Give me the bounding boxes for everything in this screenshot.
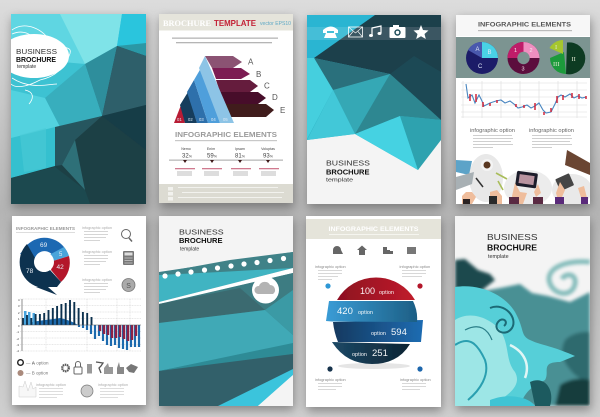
panel: infographic elements with pies [456,15,592,206]
title: template [488,254,509,260]
icon: calculator [123,251,134,265]
title: BROCHURE [326,168,370,177]
option text blocks: infographic option [82,278,112,282]
statistics row: 81% [235,154,246,160]
ribbon circle chart: 251 [372,348,388,359]
statistics row: Voluptas [261,147,275,151]
pie: roman numerals [550,40,585,74]
donut speech-bubble chart [20,238,70,295]
statistics row: 32% [182,154,193,160]
legend [18,360,49,376]
icon: dollar coin [122,278,135,292]
pie: ABC: A [476,47,480,53]
legend: — B option [26,370,49,376]
option text columns [470,128,574,148]
option columns [175,168,279,176]
ribbon circle chart: 420 [337,306,353,317]
pie band [456,37,590,78]
panel: cover 6 angled bands [159,216,293,406]
ribbon circle chart: option [358,310,373,316]
statistics row: 59% [207,154,218,160]
pyramid arrow chart: 02 [188,117,193,122]
icon: envelope [348,27,362,37]
pie: 123 [508,42,540,74]
donut speech-bubble chart: 78 [26,268,34,275]
icon bar [307,25,441,40]
title [180,230,224,252]
option text blocks: infographic option [82,226,112,230]
icon: music note [372,26,381,35]
title [326,160,370,182]
header band: TEMPLATE [214,18,256,28]
panel: cover 3 with icons [307,15,441,204]
icon: music note heads [369,32,382,37]
title [487,233,538,260]
pyramid arrow chart: D [272,93,278,102]
statistics row: Ipsam [235,147,245,151]
ribbon circle chart: 594 [391,327,407,338]
title: BROCHURE [487,243,538,252]
pie: roman numerals: I [555,44,557,51]
pie: 123: 2 [530,48,533,54]
candlestick chart [461,81,587,118]
pyramid arrow chart: A [248,58,254,66]
pyramid arrow chart: 03 [199,117,204,122]
donut speech-bubble chart: 5 [59,252,63,258]
statistics row [169,147,283,163]
title: BUSINESS [179,227,224,236]
marbled artwork [455,259,590,406]
icon: magnifier [122,230,132,242]
panel: circular ribbon chart page [306,216,441,407]
option text columns: infographic option [529,128,574,134]
bar chart: 1 [18,317,20,321]
icon row [62,362,138,374]
pie: 123: 3 [522,66,525,72]
title: BUSINESS [326,159,370,168]
header band: vector EPS10 [260,21,291,27]
pyramid arrow chart [174,56,285,123]
corner option texts [315,264,431,390]
pyramid arrow chart: E [280,106,285,115]
statistics row: Enim [207,147,215,151]
panel: pyramid infographic page [159,14,293,203]
pyramid arrow chart: 01 [177,117,182,122]
option dots [325,283,423,372]
statistics row: Nemo [181,147,191,151]
ribbon circle chart [326,277,423,369]
bottom option blocks: infographic option [36,383,66,387]
header band [306,219,441,239]
ribbon circle chart: option [371,331,386,337]
title: template [326,178,353,184]
bar chart: 3 [18,304,20,308]
pyramid arrow chart: B [256,70,261,79]
header band: INFOGRAPHIC ELEMENTS [328,226,419,233]
statistics row: 93% [263,154,274,160]
option text blocks: infographic option [82,250,112,254]
ribbon circle chart: option [352,352,367,358]
bar chart [16,298,141,353]
title: template [17,64,36,70]
bar chart: -3 [16,343,19,347]
title: BUSINESS [16,47,57,56]
pyramid arrow chart: 04 [211,117,216,122]
desk scene illustration [456,150,592,206]
dots [162,256,286,279]
option text columns: infographic option [470,128,515,134]
icon: camera [390,25,406,38]
bar chart: 4 [18,298,20,302]
ribbon circle chart: 100 [360,286,375,296]
icon: cloud badge [252,276,279,304]
ribbon circle chart: option [379,290,394,296]
icon: star [414,25,428,39]
pie: ABC: C [478,64,483,70]
corner option texts: infographic option [400,377,431,382]
title: BROCHURE [179,236,223,245]
bar chart: -4 [16,349,19,353]
pie: ABC [466,42,498,74]
option text blocks [82,226,112,293]
title: BUSINESS [487,233,538,242]
title: template [180,246,199,252]
heading: INFOGRAPHIC ELEMENTS [16,226,75,231]
corner option texts: infographic option [315,264,346,269]
heading: infographic elements: INFOGRAPHIC ELEMENTS [175,130,277,139]
header band [159,14,293,30]
title [11,26,71,104]
icon: dollar coin: S [126,283,131,290]
pie: roman numerals: III [553,61,560,68]
icon row [333,246,416,255]
bar chart: 2 [18,311,20,315]
donut speech-bubble chart: 42 [56,264,64,271]
panel: cover 1 polygon brochure [0,14,146,204]
bar chart: 0 [18,324,20,328]
legend: — A option [26,360,49,366]
bottom option blocks [19,381,128,398]
title: BROCHURE [16,55,56,64]
corner option texts: infographic option [400,264,430,269]
intro text lines [172,38,278,43]
pie: 123: 1 [514,48,517,54]
heading: INFOGRAPHIC ELEMENTS [478,22,572,28]
bar chart: -1 [16,330,19,334]
donut speech-bubble chart: 69 [40,242,48,249]
panel: cover 8 marbled waves [455,216,590,406]
footer band [159,184,293,203]
pie: ABC: B [488,50,492,56]
pie: roman numerals: II [572,56,576,63]
corner option texts: infographic option [315,377,346,382]
panel: donut and bar chart page [12,216,146,405]
bar chart: -2 [16,337,19,341]
header band: BROCHURE [163,18,211,28]
bottom option blocks: infographic option [98,383,128,387]
icon: telephone [323,26,338,38]
pyramid arrow chart: C [264,82,270,90]
pyramid arrow chart: 05 [223,117,228,122]
